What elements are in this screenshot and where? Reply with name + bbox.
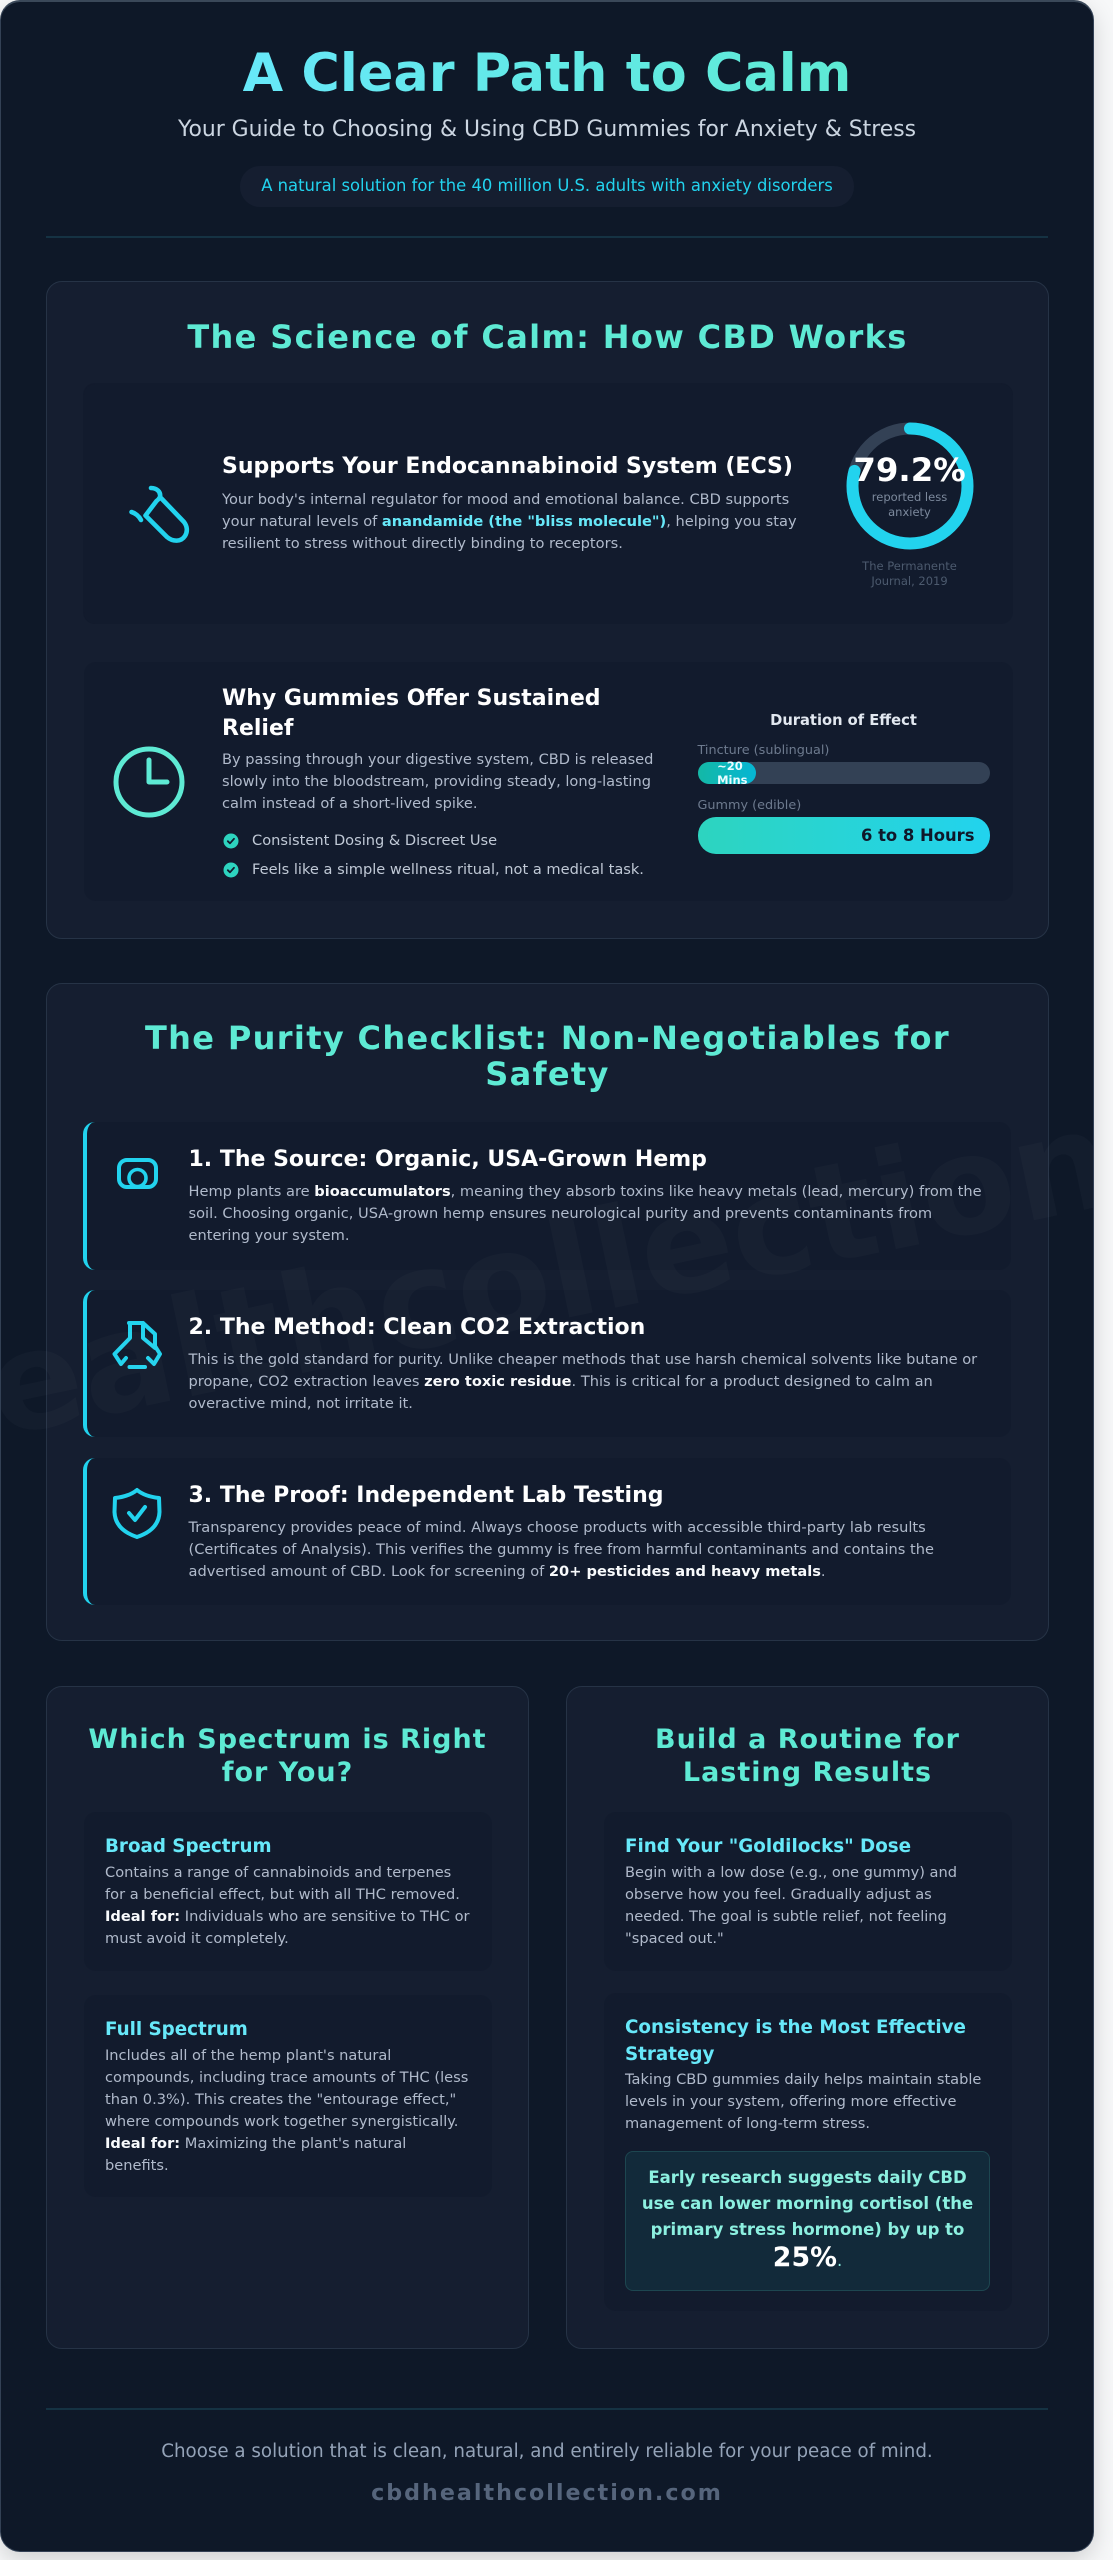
- text: broad spectrum: for a beneficial effect, but with all THC removed.: [105, 1886, 460, 1903]
- card: full spectrum: [84, 1995, 492, 2197]
- heading: routine: Lasting Results: [683, 1757, 932, 1788]
- bar: gummy 6 to 8 hours: 6 to 8 Hours: [861, 826, 974, 844]
- stat caption: [872, 490, 947, 519]
- heading: spectrum: for You?: [222, 1757, 353, 1788]
- heading: purity checklist: [145, 1019, 950, 1093]
- bar fill: ~20 mins: ~20: [717, 758, 743, 772]
- footer message: Choose a solution that is clean, natural, and entirely reliable for your peace of mind.: [161, 2441, 933, 2462]
- footer url: cbdhealthcollection.com: [371, 2480, 723, 2506]
- heading: broad spectrum: Broad Spectrum: [105, 1836, 272, 1857]
- heading: routine: Build a Routine for: [655, 1724, 960, 1755]
- card: the method: [83, 1290, 1011, 1437]
- title: A Clear Path to Calm: [243, 43, 851, 104]
- icon: test tube: [129, 486, 190, 543]
- heading: purity checklist: The Purity Checklist: Non-Negotiables for: [145, 1019, 950, 1057]
- text: gummies: By passing through your digestive system, CBD is released: [222, 751, 653, 768]
- text: gummies: calm instead of a short-lived spike.: [222, 795, 477, 812]
- text: gummies: slowly into the bloodstream, providing steady, long-lasting: [222, 773, 651, 790]
- panel: spectrum: [46, 1686, 529, 2349]
- text: the method: overactive mind, not irritate it.: [188, 1395, 413, 1412]
- icon: shield: [112, 1488, 162, 1539]
- text: the source: [188, 1183, 982, 1244]
- text: broad spectrum: must avoid it completely.: [105, 1930, 289, 1947]
- heading: gummies: [222, 686, 601, 741]
- heading: spectrum: Which Spectrum is Right: [88, 1724, 487, 1755]
- text: full spectrum: [105, 2047, 468, 2174]
- heading: the method: 2. The Method: Clean CO2 Extraction: [188, 1315, 645, 1340]
- bar fill: ~20 mins: [698, 758, 756, 787]
- text: consistency: Taking CBD gummies daily helps maintain stable: [625, 2071, 981, 2088]
- text: ecs: resilient to stress without directly binding to receptors.: [222, 535, 623, 552]
- icon: source: [117, 1158, 158, 1189]
- card: broad spectrum: [84, 1812, 492, 1971]
- callout: cortisol: primary stress hormone) by up to: [651, 2220, 964, 2239]
- text: full spectrum: benefits.: [105, 2157, 169, 2174]
- text: ecs: [222, 491, 797, 552]
- label: tincture: Tincture (sublingual): [698, 743, 829, 758]
- citation: The Permanente: [862, 559, 957, 573]
- text: the proof: (Certificates of Analysis). This verifies the gummy is free from harmful contaminants and contains the: [188, 1541, 934, 1558]
- subtitle: Your Guide to Choosing & Using CBD Gummies for Anxiety & Stress: [178, 117, 916, 142]
- label: gummy: Gummy (edible): [698, 798, 801, 813]
- text: the source: Hemp plants are bioaccumulators, meaning they absorb toxins like heavy metals (lead, mercury) from the: [188, 1183, 982, 1200]
- text: the proof: Transparency provides peace of mind. Always choose products with accessible third-party lab results: [188, 1519, 926, 1536]
- text: broad spectrum: Ideal for: Individuals who are sensitive to THC or: [105, 1908, 470, 1925]
- text: consistency: [624, 2071, 981, 2132]
- heading: spectrum: [88, 1724, 487, 1788]
- citation: Journal, 2019: [871, 574, 948, 588]
- text: the method: [188, 1351, 978, 1412]
- heading: gummies: Relief: [222, 716, 293, 741]
- heading: consistency: [625, 2017, 966, 2065]
- stat: 79.2%: 79.2%: [853, 451, 966, 489]
- text: the method: This is the gold standard for purity. Unlike cheaper methods that use harsh chemical solvents like butane or: [188, 1351, 977, 1368]
- callout: cortisol: [625, 2151, 990, 2291]
- check icon 2: [224, 862, 238, 878]
- text: consistency: management of long-term stress.: [625, 2115, 870, 2132]
- card: endocannabinoid system: [83, 383, 1013, 624]
- card: consistency: [604, 1993, 1012, 2311]
- card: goldilocks dose: [604, 1812, 1012, 1971]
- ring chart: 79.2%: [846, 422, 974, 550]
- bar fill: ~20 mins: Mins: [717, 773, 748, 787]
- text: full spectrum: than 0.3%). This creates the "entourage effect,": [105, 2091, 456, 2108]
- check icon 1: [224, 834, 238, 848]
- card: the source: [83, 1122, 1011, 1270]
- card: gummies: [84, 662, 1013, 901]
- heading: the proof: 3. The Proof: Independent Lab Testing: [188, 1483, 664, 1508]
- text: gummies: [222, 751, 653, 812]
- benefit 1: Consistent Dosing & Discreet Use: [252, 832, 497, 849]
- stat caption: anxiety: [888, 505, 931, 519]
- callout: cortisol: use can lower morning cortisol (the: [642, 2194, 973, 2213]
- text: broad spectrum: Contains a range of cannabinoids and terpenes: [105, 1864, 451, 1881]
- heading: full spectrum: Full Spectrum: [105, 2019, 248, 2040]
- heading: ecs: Supports Your Endocannabinoid System (ECS): [222, 454, 793, 479]
- callout: cortisol: 25%.: [773, 2242, 842, 2273]
- stat caption: reported less: [872, 490, 947, 504]
- panel: the science of calm: [46, 281, 1049, 939]
- callout: cortisol: Early research suggests daily CBD: [648, 2168, 967, 2187]
- heading: purity checklist: Safety: [485, 1055, 610, 1093]
- text: goldilocks dose: observe how you feel. Gradually adjust as: [625, 1886, 932, 1903]
- text: goldilocks dose: [625, 1864, 957, 1947]
- tagline pill: [240, 166, 854, 207]
- text: consistency: levels in your system, offering more effective: [625, 2093, 956, 2110]
- text: full spectrum: compounds, including trace amounts of THC (less: [105, 2069, 468, 2086]
- benefit 2: Feels like a simple wellness ritual, not a medical task.: [252, 861, 644, 878]
- text: ecs: Your body's internal regulator for mood and emotional balance. CBD supports: [222, 491, 789, 508]
- heading: gummies: Why Gummies Offer Sustained: [222, 686, 601, 711]
- card: the proof: [83, 1458, 1011, 1605]
- chart heading: duration of effect: Duration of Effect: [770, 712, 917, 729]
- text: full spectrum: Includes all of the hemp plant's natural: [105, 2047, 391, 2064]
- citation: [862, 559, 957, 588]
- panel: routine: [566, 1686, 1049, 2349]
- icon: clock: [114, 746, 184, 818]
- bar: gummy 6 to 8 hours: [698, 816, 990, 854]
- heading: routine: [655, 1724, 960, 1788]
- heading: the source: 1. The Source: Organic, USA-Grown Hemp: [188, 1147, 707, 1172]
- text: the proof: [188, 1519, 934, 1580]
- text: broad spectrum: [105, 1864, 470, 1947]
- bar: tincture: [698, 762, 990, 784]
- text: goldilocks dose: "spaced out.": [625, 1930, 724, 1947]
- text: goldilocks dose: Begin with a low dose (e.g., one gummy) and: [625, 1864, 957, 1881]
- text: full spectrum: Ideal for: Maximizing the plant's natural: [105, 2135, 406, 2152]
- text: the source: entering your system.: [188, 1227, 350, 1244]
- tagline pill: A natural solution for the 40 million U.S. adults with anxiety disorders: [261, 176, 833, 195]
- text: the source: soil. Choosing organic, USA-grown hemp ensures neurological purity and prevents contaminants from: [188, 1205, 932, 1222]
- heading: science of calm: The Science of Calm: How CBD Works: [187, 318, 908, 356]
- icon: flask: [112, 1320, 162, 1369]
- text: the proof: advertised amount of CBD. Look for screening of 20+ pesticides and heavy metals.: [188, 1563, 826, 1580]
- panel: purity checklist: [46, 983, 1049, 1641]
- text: ecs: your natural levels of anandamide (the "bliss molecule"), helping you stay: [222, 513, 797, 530]
- text: the method: propane, CO2 extraction leaves zero toxic residue. This is critical for a product designed to calm an: [188, 1373, 933, 1390]
- heading: consistency: Consistency is the Most Effective: [625, 2017, 966, 2038]
- text: goldilocks dose: needed. The goal is subtle relief, not feeling: [625, 1908, 947, 1925]
- heading: goldilocks dose: Find Your "Goldilocks" Dose: [625, 1836, 911, 1857]
- heading: consistency: Strategy: [625, 2044, 714, 2065]
- text: full spectrum: where compounds work together synergistically.: [105, 2113, 458, 2130]
